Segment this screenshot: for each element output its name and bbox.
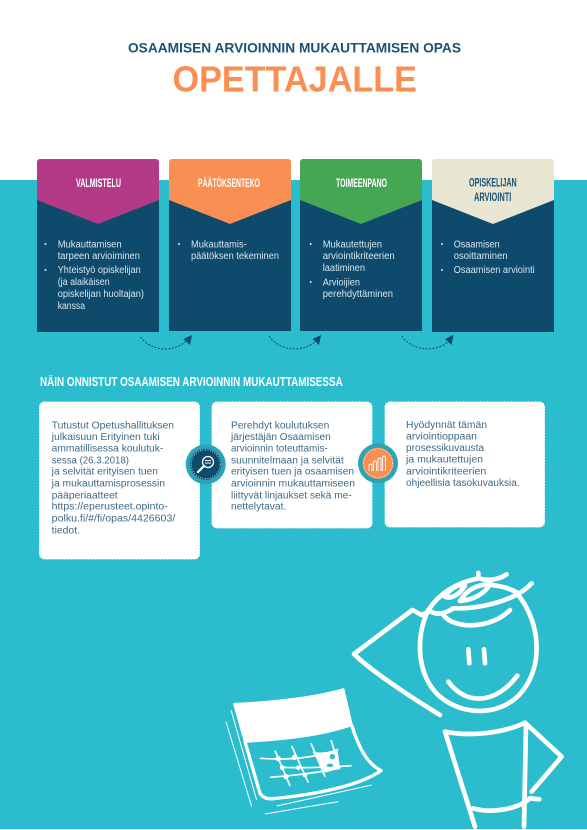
arrow: step 2 to 3 [269, 335, 321, 349]
title [128, 40, 461, 100]
panel header: opiskelijan arviointi [432, 159, 554, 224]
panel: valmistelu: VALMISTELU [76, 178, 121, 190]
main heading: OPETTAJALLE [172, 59, 417, 100]
panel text: paatoksenteko: päätöksen tekeminen [191, 251, 279, 262]
panel text: toimeenpano [310, 239, 395, 300]
card text: perehdyt: erityisen tuen ja osaamisen [231, 467, 354, 478]
panel text: paatoksenteko [178, 239, 279, 262]
card text: hyodynnat: ohjeellisia tasokuvauksia. [406, 478, 520, 489]
card text: tutustut: ja selvität erityisen tuen [51, 467, 158, 478]
card text: hyodynnat: Hyödynnät tämän [406, 420, 487, 431]
section heading: NÄIN ONNISTUT OSAAMISEN ARVIOINNIN MUKAUTTAMISESSA [40, 374, 343, 389]
arrow: step 3 to 4 [402, 335, 454, 349]
arrow: step 1 to 2 [140, 335, 192, 349]
card text: perehdyt: arvioinnin mukauttamiseen [231, 479, 355, 490]
card text: hyodynnat: arviointikriteerien [406, 466, 486, 477]
card text: hyodynnat: prosessikuvausta [406, 443, 484, 454]
card text: tutustut: pääperiaatteet [52, 490, 118, 501]
panel text: toimeenpano: arviointikriteerien [323, 251, 395, 262]
figure body and face [354, 595, 562, 827]
subtitle: OSAAMISEN ARVIOINNIN MUKAUTTAMISEN OPAS [128, 40, 461, 56]
illustration: calendar [226, 689, 381, 814]
panel text: valmistelu: opiskelijan huoltajan) [58, 289, 144, 300]
card: hyodynnat [385, 402, 544, 527]
card text: perehdyt: suunnitelmaan ja selvität [231, 455, 344, 466]
card text: perehdyt: nettelytavat. [231, 502, 286, 513]
panel text: toimeenpano: Mukautettujen [323, 239, 382, 250]
panel header: paatoksenteko [169, 159, 291, 224]
panel header: toimeenpano [300, 159, 422, 224]
icon: magnifying glass [186, 444, 226, 484]
card text: tutustut: sessa (26.3.2018) [52, 455, 129, 466]
panel text: valmistelu: Mukauttamisen [58, 239, 122, 250]
card text: tutustut: polku.fi/#/fi/opas/4426603/ [52, 514, 176, 525]
panel: opiskelijan arviointi: ARVIOINTI [474, 192, 511, 204]
panel text: opiskelijan arviointi [441, 239, 535, 276]
panel text: valmistelu: kanssa [58, 301, 85, 312]
icon: bar chart [358, 443, 398, 483]
card text: tutustut: ammatillisessa koulutuk- [52, 444, 163, 454]
card text: hyodynnat: ja mukautettujen [405, 455, 483, 466]
card text: hyodynnat: arviointioppaan [406, 432, 477, 442]
card text: perehdyt [230, 420, 355, 513]
panel text: valmistelu: tarpeen arvioiminen [58, 251, 140, 262]
teal background [0, 180, 587, 829]
card text: tutustut [51, 420, 176, 536]
card text: perehdyt: liittyvät linjaukset sekä me- [231, 490, 352, 501]
panel text: valmistelu [44, 239, 144, 312]
figure hair [428, 573, 532, 625]
panel text: valmistelu: Yhteistyö opiskelijan [58, 265, 141, 276]
card: perehdyt [212, 402, 372, 528]
panel: paatoksenteko: PÄÄTÖKSENTEKO [198, 177, 260, 190]
panel: toimeenpano [300, 159, 422, 331]
panel text: toimeenpano: Arvioijien [323, 278, 360, 288]
card text: perehdyt: Perehdyt koulutuksen [231, 420, 329, 431]
panel: toimeenpano: TOIMEENPANO [336, 178, 387, 190]
panel text: valmistelu: (ja alaikäisen [58, 277, 110, 288]
card text: tutustut: Tutustut Opetushallituksen [52, 420, 174, 431]
panel text: opiskelijan arviointi: Osaamisen [454, 239, 500, 250]
panel text: opiskelijan arviointi: osoittaminen [454, 251, 508, 262]
illustration: stick figure [354, 573, 562, 827]
panel header: valmistelu [37, 159, 159, 224]
panel text: toimeenpano: perehdyttäminen [323, 289, 393, 300]
card text: tutustut: https://eperusteet.opinto- [52, 502, 168, 513]
panel text: paatoksenteko: Mukauttamis- [191, 239, 247, 250]
card text: tutustut: tiedot. [52, 525, 80, 536]
panel text: opiskelijan arviointi: Osaamisen arviointi [454, 265, 535, 276]
panel: opiskelijan arviointi: OPISKELIJAN [469, 178, 517, 190]
panel: valmistelu [37, 159, 159, 332]
card text: perehdyt: järjestäjän Osaamisen [230, 432, 331, 443]
panel: opiskelijan arviointi [432, 159, 554, 332]
card text: hyodynnat [405, 420, 520, 489]
card: tutustut [40, 402, 200, 559]
card text: tutustut: ja mukauttamisprosessin [51, 479, 165, 490]
card text: perehdyt: arvioinnin toteuttamis- [231, 444, 328, 454]
panel: paatoksenteko [169, 159, 291, 331]
panel text: toimeenpano: laatiminen [323, 263, 365, 274]
card text: tutustut: julkaisuun Erityinen tuki [51, 432, 160, 443]
